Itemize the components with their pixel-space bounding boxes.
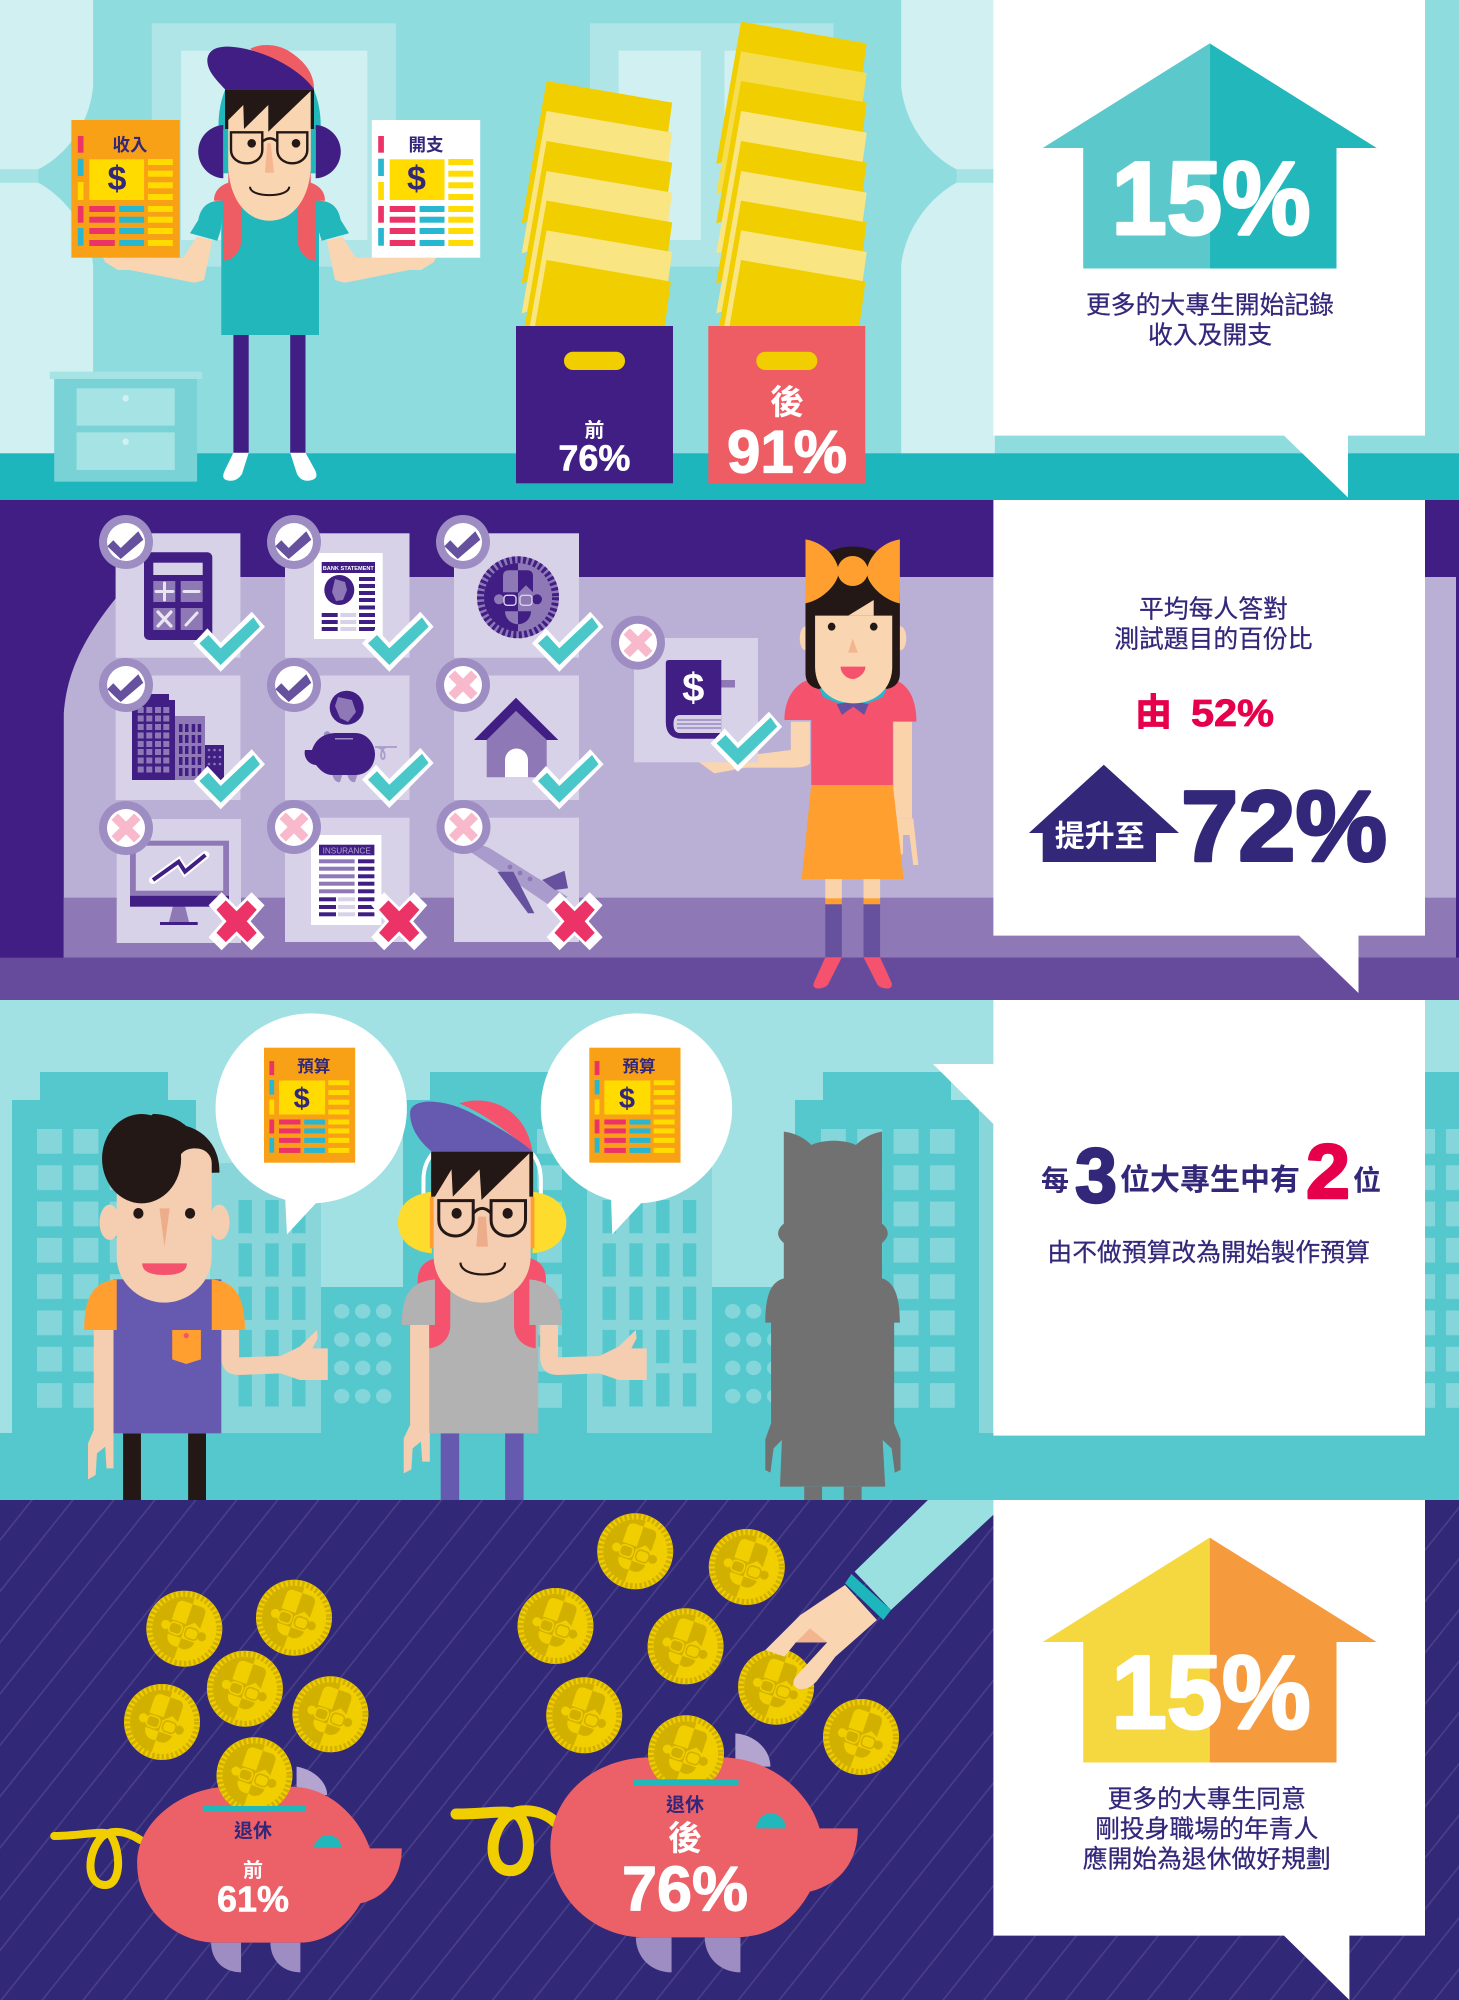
document: income: $	[108, 160, 127, 198]
panel: section 4 savings scene	[0, 1500, 1459, 2000]
headline: 2 of 3: 2	[1306, 1129, 1350, 1215]
speech bubble 2	[541, 1013, 732, 1234]
character: student in grey shirt	[398, 1101, 647, 1500]
falling coins	[121, 1511, 902, 1778]
stat: from 52%: 由	[1135, 692, 1172, 733]
headline: 2 of 3: 位	[1353, 1164, 1381, 1196]
folder stack: before	[522, 81, 672, 402]
document: income	[71, 120, 180, 258]
icon: bank statement: BANK STATEMENT	[323, 566, 374, 572]
character: student with headphones	[100, 45, 439, 481]
document: expenses: 開支	[408, 135, 444, 155]
callout panel 4: 15% agree on retirement planning	[993, 1500, 1425, 2000]
up arrow 15% yellow orange: 15%	[1112, 1635, 1310, 1751]
headline: 2 of 3	[1041, 1129, 1381, 1219]
icon: insurance document: INSURANCE	[323, 846, 371, 855]
callout panel 2: average quiz score	[993, 500, 1425, 993]
panel: section 2 quiz scene	[0, 500, 1459, 1000]
speech bubble 1	[216, 1013, 407, 1234]
up arrow 15% yellow orange	[1043, 1538, 1377, 1762]
speech bubble 1: $	[294, 1083, 310, 1115]
caption 1	[1086, 292, 1334, 350]
stat: from 52%	[1135, 692, 1274, 735]
box: before 76%: 前	[584, 419, 604, 442]
speech bubble 2: $	[619, 1083, 635, 1115]
background wall and floor	[0, 500, 1459, 1000]
speech bubble 1: 預算	[297, 1056, 330, 1076]
panel: section 3 city scene	[0, 1000, 1459, 1500]
document: income: 收入	[112, 135, 148, 155]
piggy bank: after 76%: 76%	[622, 1855, 748, 1925]
headline: 2 of 3: 每	[1041, 1165, 1069, 1196]
icon: insurance document	[311, 835, 381, 925]
status badges and answer marks	[99, 515, 782, 950]
caption 2	[1114, 596, 1313, 654]
box: after 91%: 後	[770, 384, 804, 422]
caption 4	[1083, 1786, 1331, 1874]
up arrow 15% teal	[1043, 43, 1377, 269]
character: grey silhouette	[765, 1132, 901, 1500]
icon: piggy bank with coin	[305, 691, 397, 782]
icon: large coin	[477, 556, 559, 638]
girl's left arm and hand behind the card	[698, 722, 810, 773]
up arrow 15% teal: 15%	[1112, 141, 1310, 257]
stat: 72%: 72%	[1181, 770, 1387, 882]
document: expenses: $	[407, 160, 426, 198]
caption 1: 更多的大專生開始記錄	[1086, 292, 1334, 320]
caption 4: 更多的大專生同意	[1108, 1786, 1306, 1814]
up arrow label: rises to	[1029, 765, 1179, 862]
icon: book with dollar: $	[682, 666, 704, 710]
icon: buildings	[132, 694, 224, 780]
document: expenses	[372, 120, 480, 258]
caption 4: 剛投身職場的年青人	[1095, 1816, 1318, 1844]
box: before 76%: 76%	[558, 438, 630, 479]
piggy bank: after 76%: 後	[668, 1820, 702, 1858]
piggy bank: after 76%	[456, 1713, 858, 1972]
box: after 91%	[708, 326, 865, 486]
icon: bank statement	[314, 553, 383, 639]
speech bubble 2: 預算	[622, 1056, 656, 1076]
icon: airplane	[471, 845, 568, 913]
caption 3: 由不做預算改為開始製作預算	[1047, 1239, 1370, 1267]
caption 2: 測試題目的百份比	[1114, 626, 1313, 654]
box: after 91%: 91%	[727, 419, 847, 486]
caption 2: 平均每人答對	[1139, 596, 1288, 624]
piggy bank: before 61%: 退休	[234, 1820, 272, 1842]
box: before 76%	[516, 326, 673, 483]
callout panel 1: 15% record income and expenses	[993, 0, 1425, 498]
icon: house	[474, 698, 558, 777]
stat: from 52%: 52%	[1191, 693, 1274, 735]
callout panel 3: two of three students start budgeting	[933, 1000, 1425, 1436]
caption 1: 收入及開支	[1148, 322, 1272, 350]
up arrow label: rises to: 提升至	[1055, 820, 1145, 854]
panel: section 1 room scene	[0, 0, 1459, 500]
piggy bank: after 76%: 退休	[666, 1794, 704, 1816]
character: girl with orange bow	[784, 539, 918, 989]
striped background	[0, 1500, 1459, 2000]
caption 4: 應開始為退休做好規劃	[1083, 1846, 1331, 1874]
icon: calculator	[144, 552, 212, 640]
piggy bank: before 61%	[54, 1735, 402, 1972]
hand dropping coin	[765, 1500, 995, 1689]
piggy bank: before 61%: 61%	[217, 1879, 289, 1920]
headline: 2 of 3: 3	[1075, 1133, 1117, 1219]
icon: book with dollar	[666, 660, 735, 739]
room background	[0, 0, 1459, 500]
city background	[0, 1000, 1459, 1500]
folder stack: after	[716, 22, 867, 402]
character: man with thumbs up	[84, 1114, 328, 1500]
headline: 2 of 3: 位大專生中有	[1120, 1163, 1300, 1197]
quiz cards	[116, 533, 758, 943]
nightstand	[50, 372, 202, 482]
piggy bank: before 61%: 前	[243, 1859, 263, 1882]
icon: stock chart monitor	[130, 841, 229, 925]
